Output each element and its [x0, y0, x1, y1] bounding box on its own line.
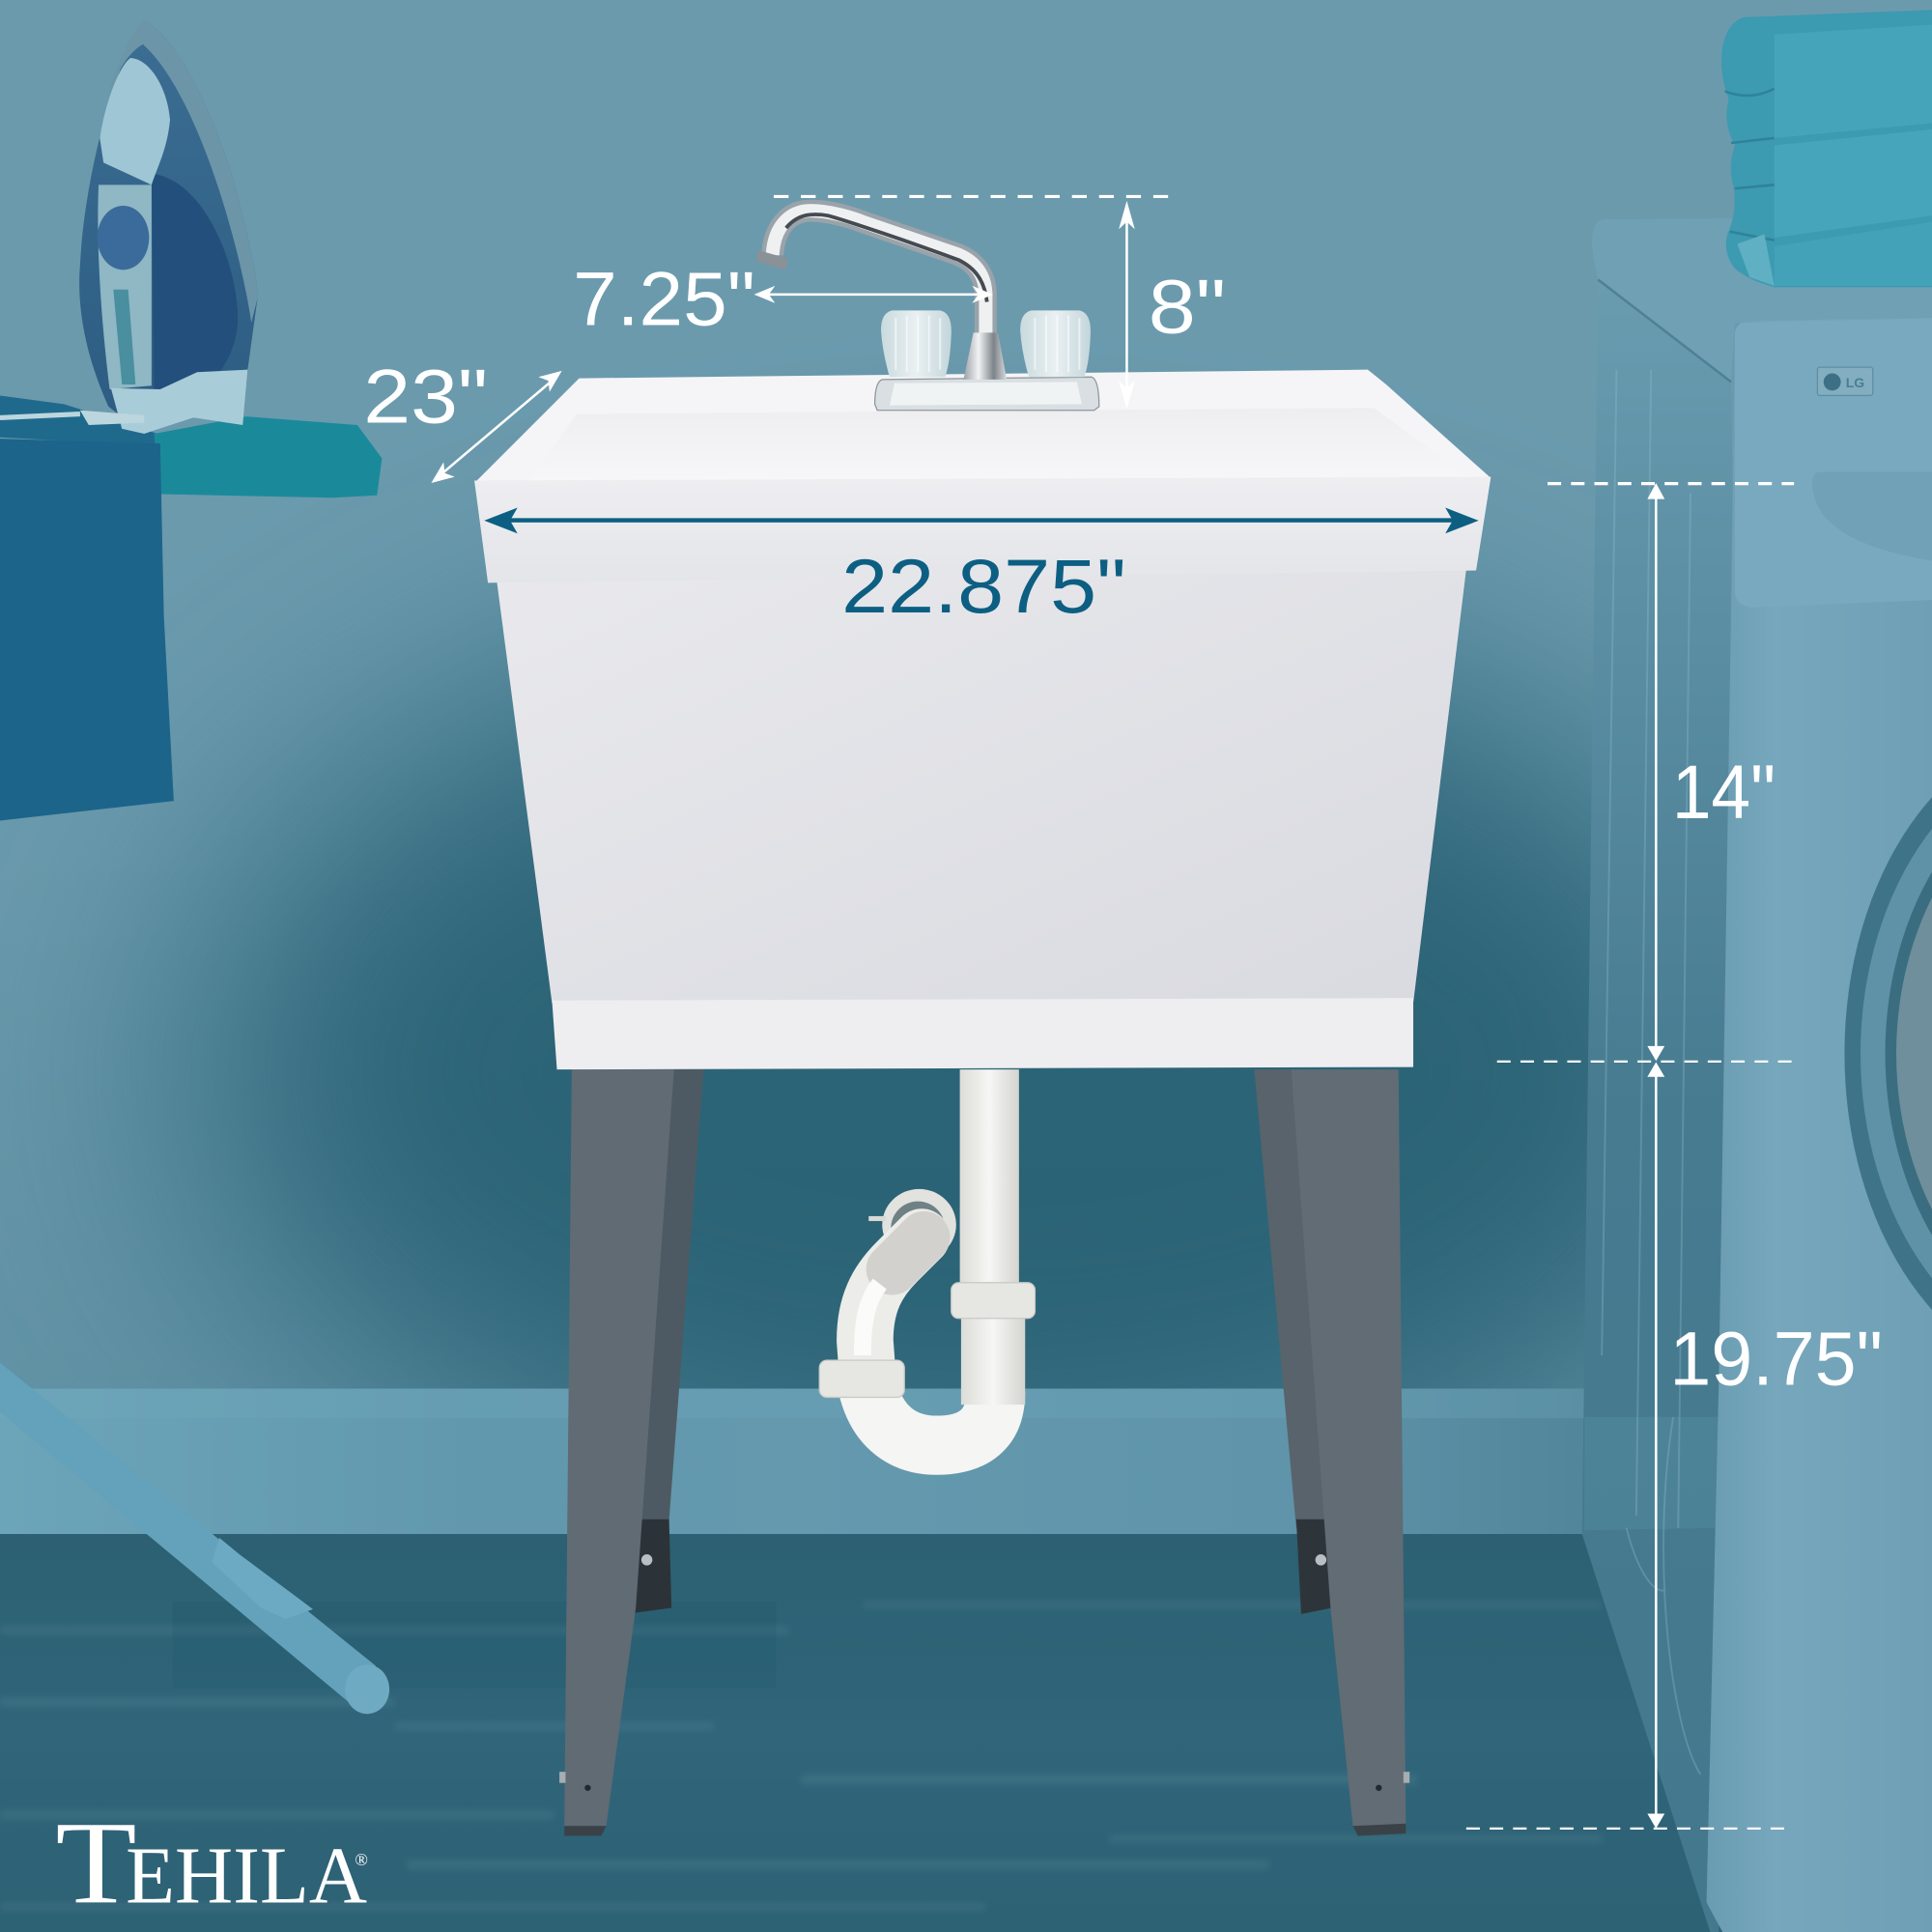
label 14: 14" — [1672, 749, 1776, 835]
spout reach arrow — [754, 286, 993, 303]
iron silhouette — [79, 21, 258, 434]
lower slip nut — [819, 1360, 904, 1397]
depth arrow — [431, 371, 562, 483]
washer front — [1707, 317, 1932, 1932]
left leg — [559, 1069, 703, 1836]
iron handle top — [99, 58, 170, 185]
faucet cone — [963, 332, 1007, 380]
iron blue tank — [152, 174, 238, 399]
width arrow — [484, 508, 1479, 533]
Tehila logo: ® — [355, 1850, 368, 1869]
dimension 7.25 inch — [573, 256, 993, 342]
aerator tip — [756, 250, 788, 270]
tub basin — [529, 408, 1468, 480]
dimension 14 inch — [1548, 483, 1794, 1061]
right knob — [1020, 310, 1091, 377]
iron dial — [98, 206, 149, 270]
baseboard — [0, 1389, 1602, 1537]
laundry tub — [474, 370, 1491, 1069]
U bend — [867, 1386, 996, 1445]
drawer handle — [1812, 472, 1932, 560]
dimension 19.75 inch — [1466, 1062, 1883, 1829]
label 19.75: 19.75" — [1669, 1316, 1883, 1402]
washer side reflections — [1602, 370, 1700, 1775]
label 23: 23" — [363, 354, 488, 440]
right leg — [1254, 1069, 1409, 1836]
cloth over board top — [0, 395, 160, 446]
drain trap — [819, 1069, 1035, 1445]
dimension 22.875 inch — [484, 508, 1479, 629]
baseboard seen through washer side — [1584, 1417, 1725, 1530]
tailpiece pipe — [960, 1069, 1019, 1285]
washer top edge shadow — [1598, 280, 1731, 382]
dimension 8 inch — [774, 196, 1226, 409]
bend arm — [865, 1237, 922, 1374]
right bracket — [1296, 1520, 1332, 1614]
faucet — [756, 211, 1099, 411]
tub top dashed line — [1548, 482, 1794, 485]
dimension 23 inch — [363, 354, 562, 483]
washer drawer — [1735, 318, 1932, 608]
flange — [868, 1189, 956, 1261]
label 8: 8" — [1149, 263, 1226, 349]
iron chrome column — [98, 185, 152, 389]
tub bottom dashed line — [1497, 1061, 1794, 1063]
floor — [0, 1534, 1932, 1932]
faucet height dashed line — [774, 195, 1171, 198]
iron cord — [0, 411, 144, 425]
Tehila logo: T — [55, 1798, 137, 1928]
LG badge: LG — [1846, 375, 1864, 390]
iron outer strip — [99, 21, 258, 323]
floor dashed line — [1466, 1828, 1792, 1830]
washer side panel — [1582, 280, 1735, 1932]
left knob — [881, 310, 952, 377]
tub height arrow — [1647, 483, 1664, 1061]
steam iron — [79, 21, 258, 434]
washer top — [1592, 216, 1932, 382]
tub bottom band — [552, 998, 1413, 1069]
iron column dark reflection — [113, 290, 135, 384]
upper slip nut — [952, 1283, 1035, 1319]
ironing board leg — [0, 1363, 389, 1714]
tub rim front band — [474, 477, 1491, 582]
tub rim top — [474, 370, 1491, 483]
Tehila logo — [55, 1798, 368, 1928]
deck plate — [875, 377, 1099, 411]
Tehila logo: EHILA — [126, 1831, 367, 1920]
leg height arrow — [1647, 1062, 1664, 1829]
ironing board cover — [154, 416, 382, 497]
sink shadow on wall — [197, 616, 1775, 1528]
spout — [773, 211, 987, 357]
LG badge — [1817, 367, 1873, 395]
draped blue cloth — [0, 439, 174, 820]
label 22.875: 22.875" — [841, 543, 1126, 629]
left bracket — [635, 1520, 671, 1613]
trap riser — [961, 1316, 1025, 1405]
washer door — [1844, 729, 1932, 1378]
faucet height arrow — [1119, 201, 1135, 409]
arm shaded top — [892, 1237, 924, 1269]
washing machine — [1582, 216, 1932, 1932]
arm highlight — [863, 1284, 880, 1355]
label 7.25: 7.25" — [573, 256, 755, 342]
folded towels — [1721, 10, 1932, 287]
wall background — [0, 0, 1932, 1540]
tub body — [497, 569, 1466, 1003]
iron heel — [111, 370, 247, 434]
